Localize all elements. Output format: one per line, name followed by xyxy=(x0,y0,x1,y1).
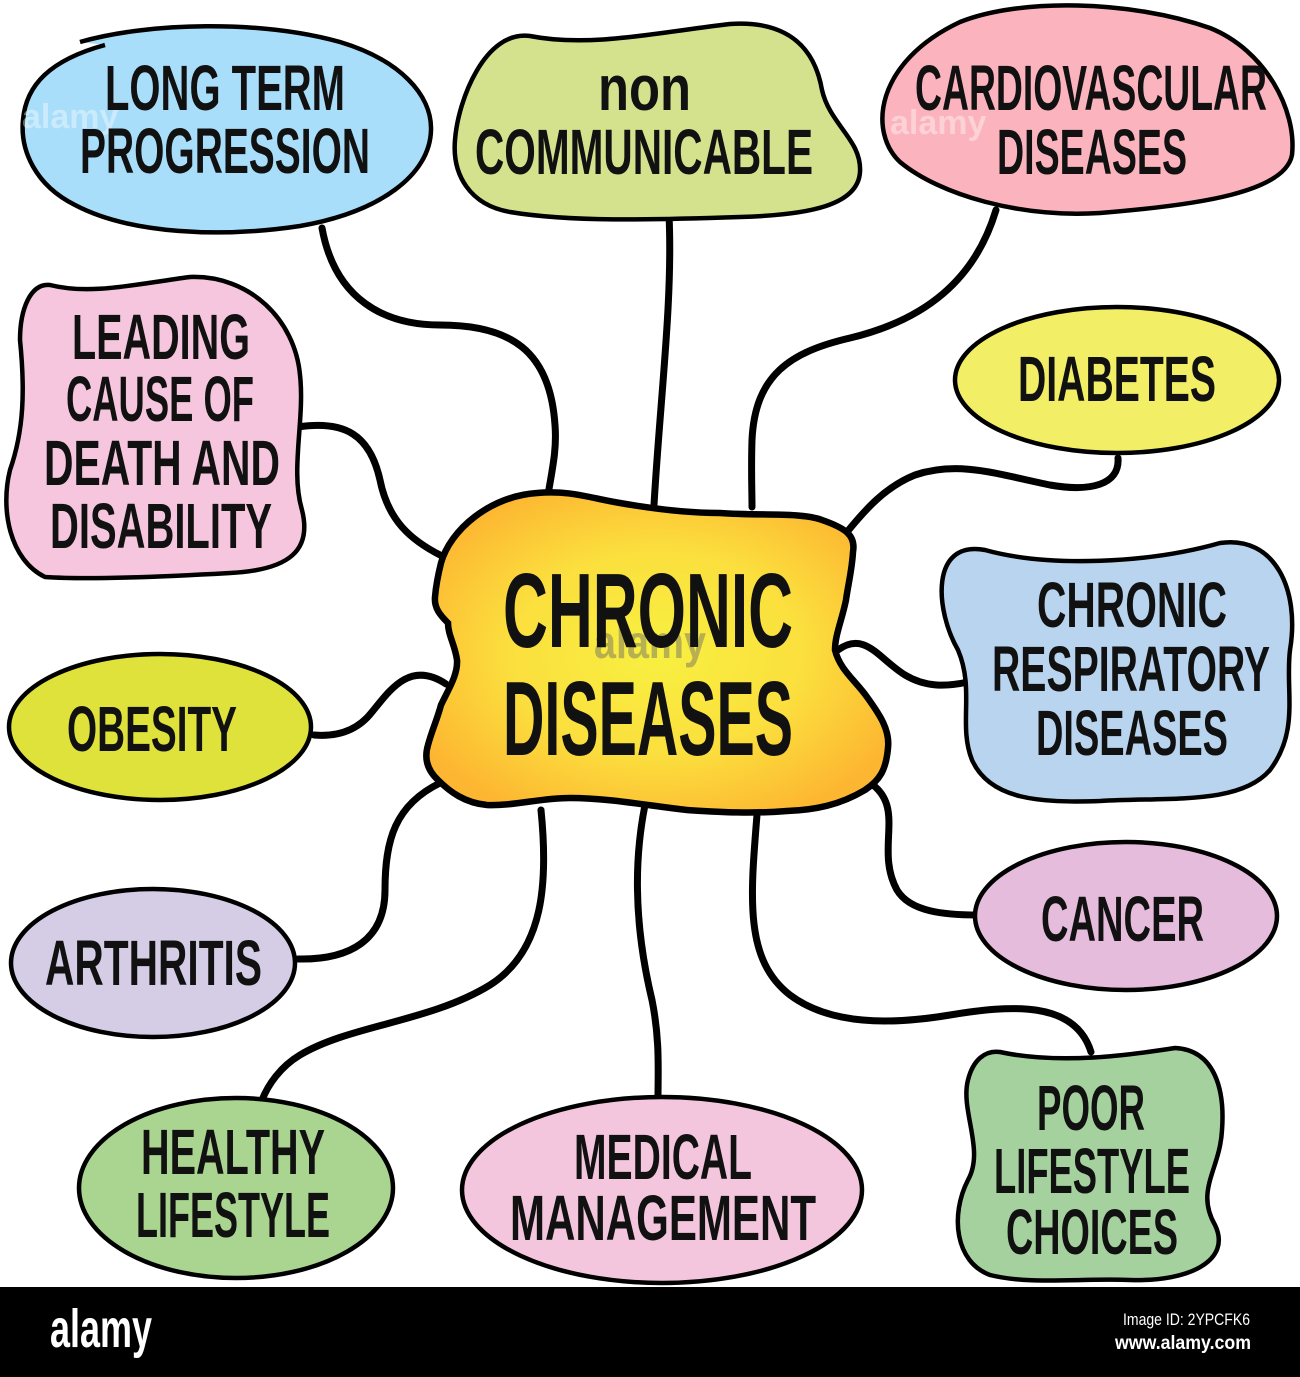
node: leading cause of death and disability: LEADING xyxy=(72,301,250,373)
node: long term progression: LONG TERM xyxy=(105,52,345,124)
node: leading cause of death and disability: DISABILITY xyxy=(50,490,272,562)
footer logo: alamy: alamy xyxy=(50,1299,152,1359)
node: healthy lifestyle: LIFESTYLE xyxy=(136,1179,330,1251)
node: chronic respiratory diseases xyxy=(942,542,1292,801)
node: non communicable xyxy=(455,24,860,219)
node: cardiovascular diseases: alamy xyxy=(890,104,986,142)
central node: chronic diseases: alamy xyxy=(594,616,706,668)
node: poor lifestyle choices: CHOICES xyxy=(1006,1196,1178,1268)
node: obesity xyxy=(9,654,311,800)
node: medical management: MEDICAL xyxy=(574,1121,752,1193)
node: poor lifestyle choices xyxy=(958,1048,1222,1281)
node: arthritis xyxy=(11,889,295,1037)
node: long term progression: alamy xyxy=(22,98,118,136)
node: non communicable: COMMUNICABLE xyxy=(475,116,813,188)
node: long term progression xyxy=(22,26,431,232)
footer bar xyxy=(0,1287,1300,1377)
central node: chronic diseases xyxy=(426,492,888,813)
node: medical management xyxy=(462,1097,862,1283)
node: obesity: OBESITY xyxy=(67,693,237,765)
node: long term progression: PROGRESSION xyxy=(80,115,370,187)
footer image id: Image ID: 2YPCFK6 xyxy=(1123,1310,1250,1329)
node: medical management: MANAGEMENT xyxy=(510,1182,816,1254)
node: leading cause of death and disability xyxy=(6,277,304,578)
node: leading cause of death and disability: CAUSE OF xyxy=(66,363,254,435)
node: diabetes xyxy=(955,307,1279,453)
node: arthritis: ARTHRITIS xyxy=(45,927,262,999)
footer website: www.alamy.com xyxy=(1114,1333,1251,1354)
central node: chronic diseases: CHRONIC xyxy=(503,552,793,670)
connector lines xyxy=(262,210,1118,1100)
node: healthy lifestyle: HEALTHY xyxy=(141,1116,325,1188)
node: leading cause of death and disability: DEATH AND xyxy=(44,427,280,499)
node: healthy lifestyle xyxy=(79,1098,393,1278)
node: poor lifestyle choices: POOR xyxy=(1037,1072,1145,1144)
node: cardiovascular diseases xyxy=(882,5,1293,214)
node: non communicable: non xyxy=(598,52,691,124)
central node: chronic diseases: DISEASES xyxy=(503,660,793,778)
node: cancer xyxy=(975,842,1277,990)
